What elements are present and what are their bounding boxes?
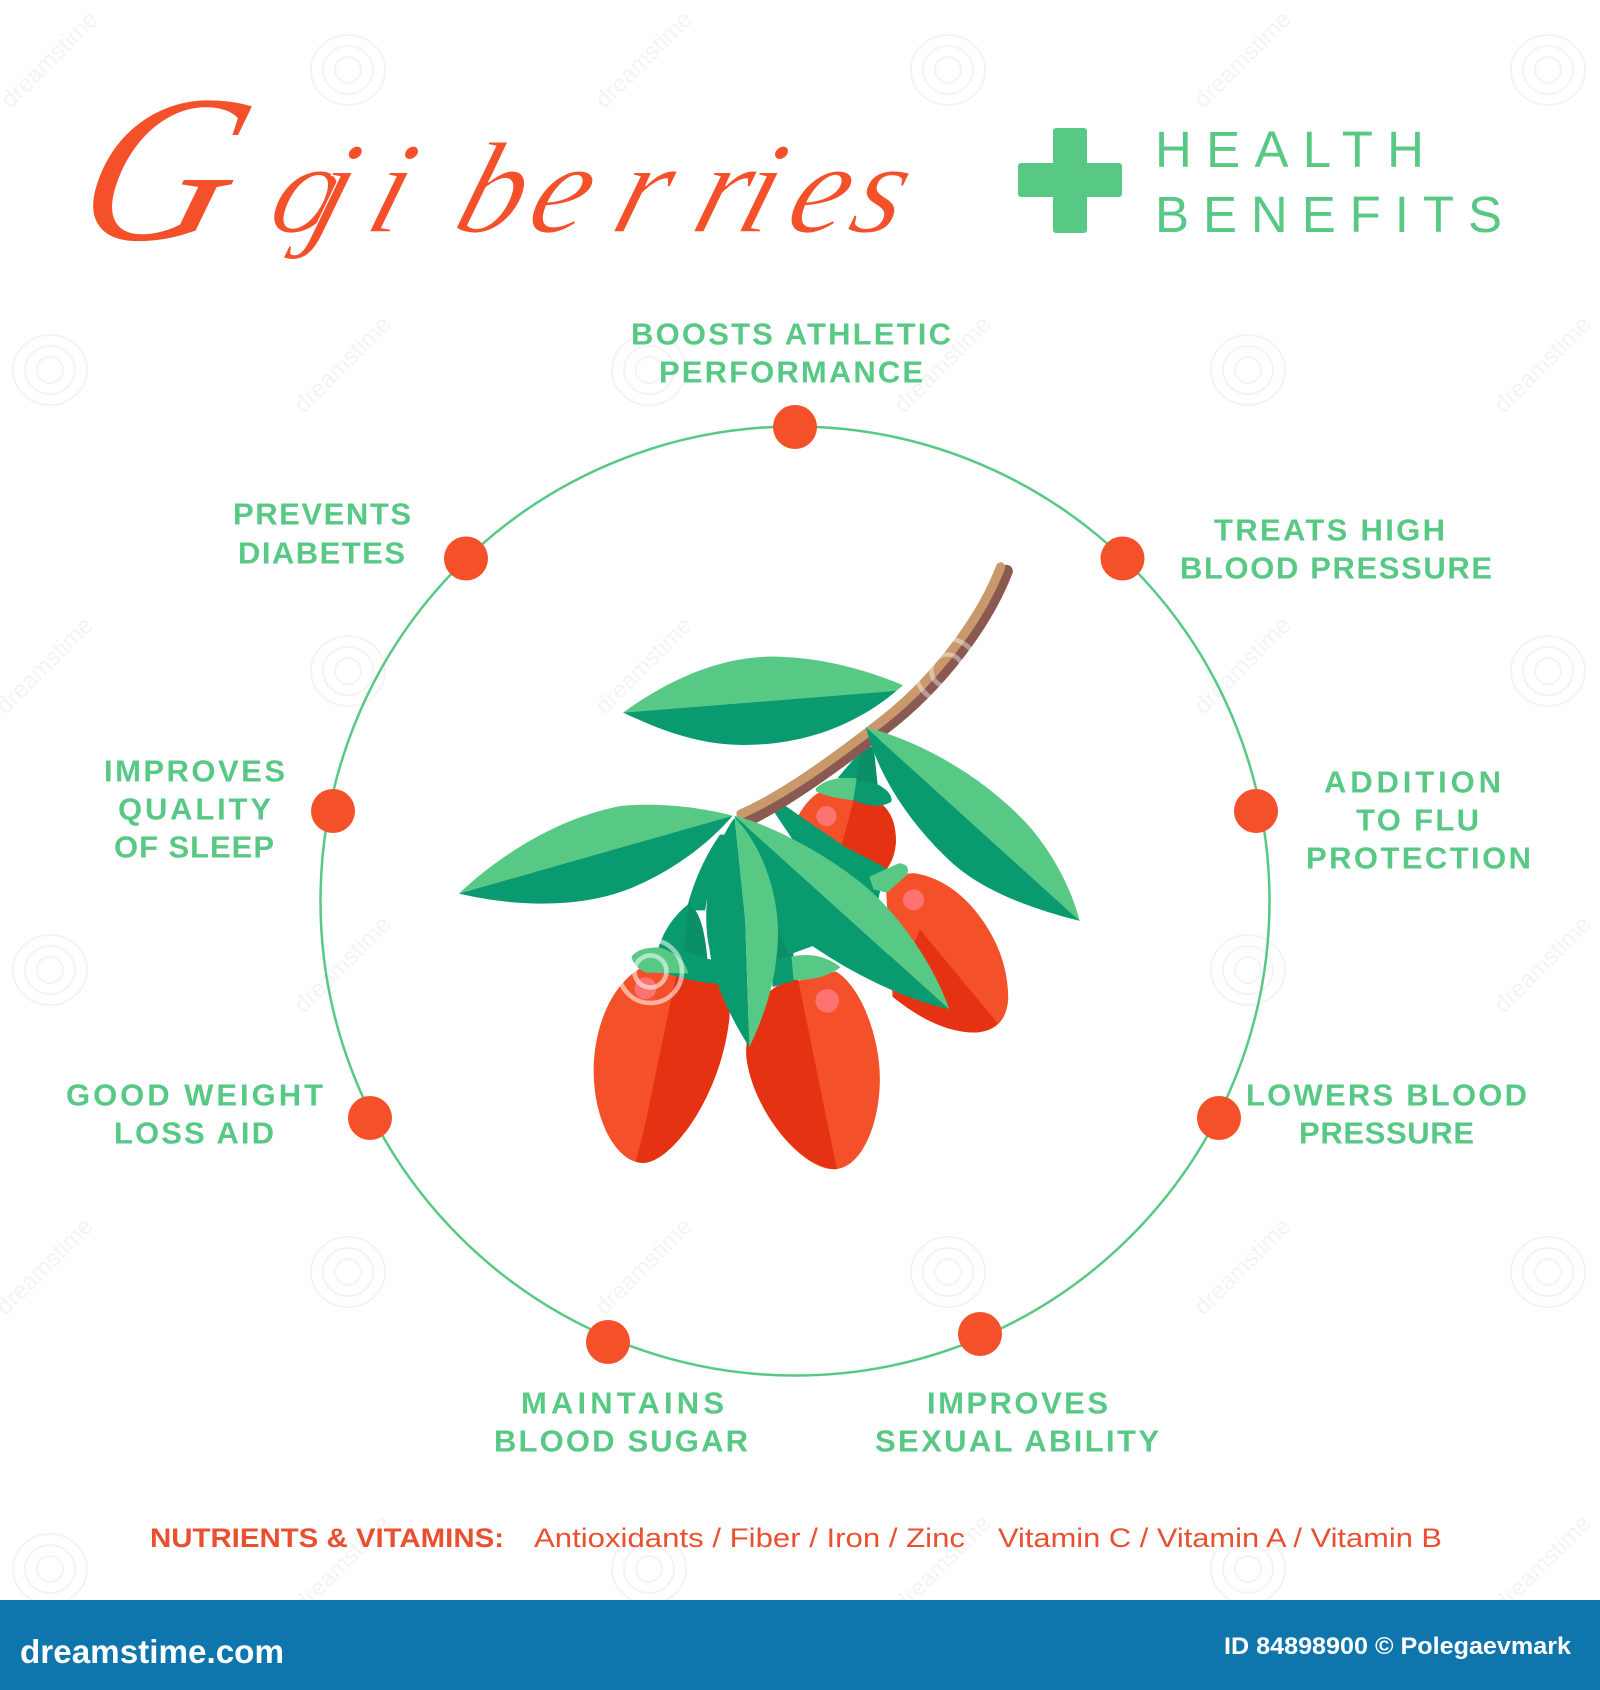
title: G <box>54 51 278 286</box>
circle ring <box>320 426 1270 1376</box>
label: prevents diabetes: PREVENTS <box>233 496 411 532</box>
label: improves quality of sleep: QUALITY <box>118 792 271 826</box>
label: lowers blood pressure <box>1246 1078 1527 1150</box>
subtitle: health benefits <box>1155 121 1502 243</box>
label: improves quality of sleep <box>104 754 285 864</box>
label: improves sexual ability: SEXUAL ABILITY <box>875 1424 1159 1458</box>
label: improves quality of sleep: OF SLEEP <box>114 830 274 864</box>
label: good weight loss aid: LOSS AID <box>114 1116 274 1150</box>
label: treats high blood pressure: BLOOD PRESSURE <box>1180 550 1492 586</box>
watermark diagonal text: dreamstime <box>289 1510 397 1618</box>
label: addition to flu protection: PROTECTION <box>1306 840 1531 876</box>
label: lowers blood pressure: LOWERS BLOOD <box>1246 1078 1527 1112</box>
berry stems <box>686 746 885 961</box>
watermark diagonal text: dreamstime <box>590 6 698 114</box>
nutrients and vitamins line: Antioxidants / Fiber / Iron / Zinc <box>534 1523 965 1553</box>
watermark spirals over art <box>619 639 979 1003</box>
title <box>54 51 951 286</box>
leaf: left <box>459 805 733 904</box>
watermark diagonal text: dreamstime <box>1189 6 1297 114</box>
left berry <box>594 967 730 1163</box>
label: boosts athletic performance <box>631 316 951 390</box>
nutrients and vitamins line: Vitamin C / Vitamin A / Vitamin B <box>998 1523 1442 1553</box>
label: maintains blood sugar: BLOOD SUGAR <box>494 1424 748 1458</box>
label: treats high blood pressure <box>1180 512 1492 586</box>
title: oji berries <box>255 116 931 260</box>
left berry calyx <box>632 904 720 984</box>
label: improves quality of sleep: IMPROVES <box>104 754 285 788</box>
nutrients and vitamins line <box>150 1523 1442 1553</box>
watermark diagonal text: dreamstime <box>590 1213 698 1321</box>
watermark diagonal text: dreamstime <box>1189 1213 1297 1321</box>
watermark diagonal text: dreamstime <box>889 1510 997 1618</box>
footer bar <box>0 1600 1600 1690</box>
back berry <box>791 793 896 875</box>
watermark diagonal text: dreamstime <box>889 311 997 419</box>
stem <box>741 567 1007 821</box>
watermark diagonal text: dreamstime <box>1189 612 1297 720</box>
benefit labels <box>66 316 1531 1458</box>
footer logo text: dreamstime.com <box>20 1633 284 1670</box>
subtitle: health benefits: BENEFITS <box>1155 186 1502 243</box>
berry highlight on left berry <box>634 977 656 999</box>
label: addition to flu protection <box>1306 764 1531 876</box>
watermark diagonal text: dreamstime <box>1489 911 1597 1019</box>
right berry calyx <box>869 863 908 893</box>
label: good weight loss aid: GOOD WEIGHT <box>66 1078 323 1112</box>
label: lowers blood pressure: PRESSURE <box>1299 1116 1474 1150</box>
label: boosts athletic performance: BOOSTS ATHLETIC <box>631 316 951 352</box>
label: addition to flu protection: ADDITION <box>1324 764 1501 800</box>
watermark diagonal text: dreamstime <box>1489 1510 1597 1618</box>
ring marker dots <box>311 405 1278 1364</box>
label: improves sexual ability: IMPROVES <box>927 1386 1108 1420</box>
label: good weight loss aid <box>66 1078 323 1150</box>
footer image id: ID 84898900 © Polegaevmark <box>1224 1633 1572 1660</box>
label: prevents diabetes: DIABETES <box>238 536 405 570</box>
nutrients and vitamins line: NUTRIENTS & VITAMINS: <box>150 1523 504 1553</box>
label: addition to flu protection: TO FLU <box>1356 802 1479 838</box>
back berry calyx <box>816 778 892 806</box>
leaf: right <box>866 727 1080 921</box>
label: maintains blood sugar: MAINTAINS <box>521 1386 724 1420</box>
label: improves sexual ability <box>875 1386 1159 1458</box>
label: prevents diabetes <box>233 496 411 570</box>
icon: health cross <box>1018 128 1122 233</box>
label: treats high blood pressure: TREATS HIGH <box>1214 512 1445 548</box>
middle berry <box>746 971 880 1169</box>
watermark diagonal text: dreamstime <box>289 911 397 1019</box>
watermark diagonal text: dreamstime <box>1489 311 1597 419</box>
middle berry calyx <box>773 955 841 987</box>
leaf: top <box>623 657 903 745</box>
watermark diagonal text: dreamstime <box>590 612 698 720</box>
label: maintains blood sugar <box>494 1386 748 1458</box>
label: boosts athletic performance: PERFORMANCE <box>659 354 923 390</box>
goji branch illustration <box>459 567 1080 1169</box>
watermark diagonal text: dreamstime <box>289 311 397 419</box>
leaf: hanging centre <box>706 818 778 1047</box>
right berry <box>886 873 1008 1032</box>
subtitle: health benefits: HEALTH <box>1155 121 1424 178</box>
leaf: lower right <box>735 816 949 1009</box>
